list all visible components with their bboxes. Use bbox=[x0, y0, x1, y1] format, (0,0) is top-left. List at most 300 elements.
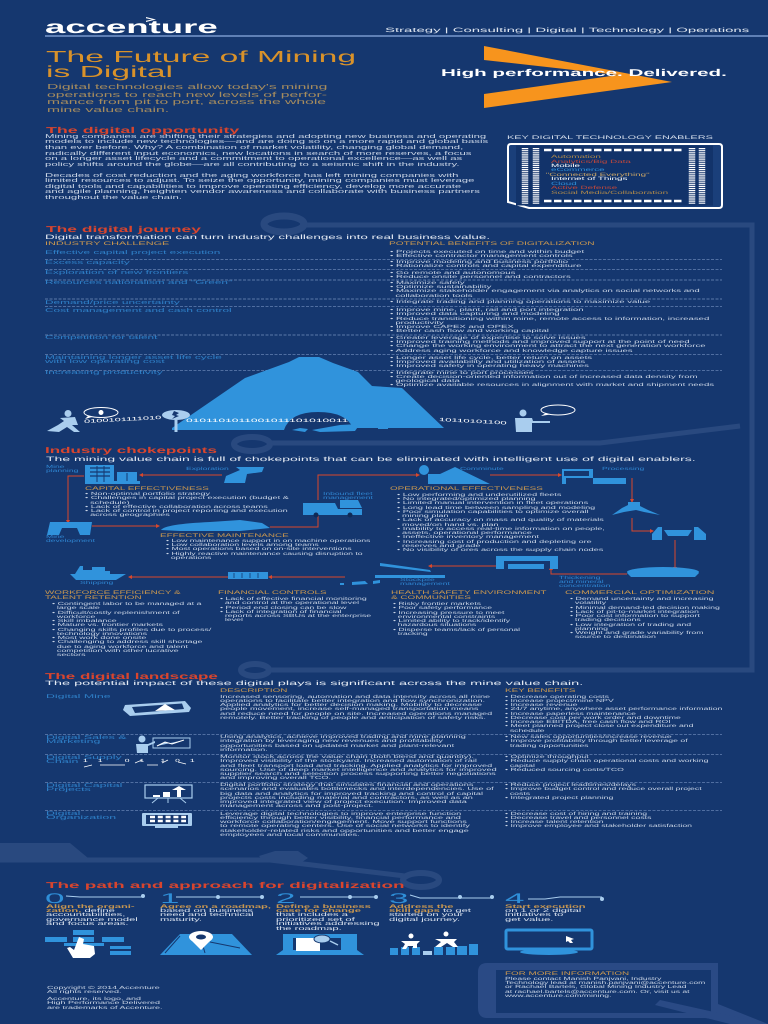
copyright: Copyright © 2014 Accenture bbox=[47, 985, 160, 990]
subheading: Digital transformation can turn industry challenges into real business value. bbox=[45, 234, 490, 240]
icon: binary graph bbox=[84, 760, 186, 767]
numbered step 3: started on your bbox=[389, 912, 463, 918]
arrows: value chain flow bbox=[66, 473, 677, 579]
block: workforce efficiency: • Mature vs. frontier markets bbox=[52, 622, 163, 627]
binary: left: 0100101111010 bbox=[84, 416, 161, 425]
label: inbound fleet: Inbound fleet bbox=[323, 491, 372, 496]
panel: for more information: at rachael.bartels@accenture.com. Or, visit us at bbox=[505, 989, 690, 994]
block: capital effectiveness: • Lack of effective collaboration across teams bbox=[85, 504, 268, 509]
row: digital mine: Applied analytics for better decision making. Mobility to decrease bbox=[220, 702, 482, 707]
block: workforce efficiency: large scale bbox=[57, 605, 100, 610]
block: operational effectiveness: • Ineffective inventory management bbox=[397, 534, 539, 539]
block: health safety environment: HEALTH SAFETY ENVIRONMENT bbox=[391, 590, 546, 596]
block: commercial optimization: • Lack of pit-to-market integration bbox=[570, 609, 699, 614]
icon: processing bbox=[562, 469, 626, 484]
block: workforce efficiency: workforce bbox=[57, 614, 95, 619]
text block: opportunity paragraph 2: and agile planning, heighten vendor awareness and collaborate with business partners bbox=[45, 189, 480, 195]
block: financial controls: reports across SBUs at the enterprise bbox=[225, 613, 371, 618]
block: capital effectiveness: CAPITAL EFFECTIVENESS bbox=[85, 486, 209, 492]
panel: for more information bbox=[477, 963, 768, 1024]
heading: The digital opportunity bbox=[46, 125, 239, 135]
enablers heading: KEY DIGITAL TECHNOLOGY ENABLERS bbox=[507, 134, 713, 140]
icon: monitor with cursor bbox=[506, 930, 592, 955]
numbered step 2: that includes a bbox=[276, 912, 348, 918]
icon: people on steps bbox=[390, 932, 478, 955]
row: digital organization: Leverage digital technologies to improve enterprise function bbox=[220, 811, 461, 816]
block: effective maintenance bbox=[160, 532, 370, 560]
block: financial controls: level bbox=[225, 617, 243, 622]
numbered step 2: initiatives addressing bbox=[276, 921, 380, 927]
trademark note bbox=[47, 997, 163, 1010]
block: health safety environment: • Increasing pressure to meet bbox=[393, 610, 504, 615]
block: workforce efficiency bbox=[45, 590, 212, 657]
numbered step 0: and focus areas. bbox=[46, 921, 128, 927]
icon: truck bbox=[303, 500, 362, 518]
chip: key digital technology enablers bbox=[507, 143, 723, 209]
text block: opportunity paragraph 2: throughout the value chain. bbox=[45, 195, 182, 201]
challenge list bbox=[45, 250, 232, 376]
icon: conveyor bbox=[419, 465, 490, 484]
row: digital supply chain: Chain bbox=[46, 759, 78, 765]
row: digital supply chain: • Reduce supply chain operational costs and working bbox=[505, 758, 708, 763]
row: digital capital projects: • Integrated project planning bbox=[505, 795, 613, 800]
block: operational effectiveness: • Inability to access real-time information on people, bbox=[397, 526, 605, 531]
copyright: All rights reserved. bbox=[47, 989, 122, 994]
icon: warehouse bbox=[496, 556, 558, 569]
benefits list: • Change the working environment to attract the next generation workforce bbox=[390, 343, 706, 348]
benefits list: • Integrate mine to port processes bbox=[390, 370, 533, 375]
block: effective maintenance: • Low maintenance support in on machine operations bbox=[166, 538, 370, 543]
text block: opportunity paragraph 2: Decades of cost reduction and the aging workforce has left mining companies with bbox=[45, 172, 458, 178]
chip: key digital technology enablers: "Connected Everything" bbox=[546, 172, 650, 177]
block: operational effectiveness: • Poor simulation capabilities to optimize overall bbox=[397, 509, 589, 514]
row: digital mine: and reduce need for people on site. Increased operations managed bbox=[220, 711, 492, 716]
block: financial controls: FINANCIAL CONTROLS bbox=[218, 590, 327, 596]
label: mine development: Mine bbox=[46, 534, 65, 539]
row: digital supply chain: Digital Supply bbox=[46, 755, 122, 761]
subtitle: mine value chain. bbox=[47, 105, 169, 114]
chip: key digital technology enablers: Social Media/Collaboration bbox=[551, 190, 668, 195]
panel: the digital landscape bbox=[45, 671, 722, 837]
icon: lightning pin bbox=[162, 410, 190, 432]
row: digital sales and marketing bbox=[46, 734, 688, 752]
challenge list: Effective capital project execution bbox=[45, 250, 220, 256]
heading: The digital landscape bbox=[45, 671, 218, 681]
numbered step 1: based on business bbox=[160, 908, 253, 914]
row: digital organization: Organization bbox=[46, 815, 116, 821]
row: digital sales and marketing: • Improve profitability through better leverage of bbox=[505, 738, 688, 743]
icon: excavator bbox=[224, 467, 264, 483]
block: operational effectiveness: reserves and grade bbox=[402, 543, 480, 548]
benefits list: geological data bbox=[395, 378, 460, 383]
row: digital mine: Increased sensoring, automation and data intensity across all mine bbox=[220, 694, 490, 699]
block: operational effectiveness: • Increasing cost of production and depleting ore bbox=[397, 539, 592, 544]
numbered step 3 bbox=[389, 890, 471, 923]
block: health safety environment: hazardous situations bbox=[398, 622, 476, 627]
numbered step 1 bbox=[160, 890, 271, 923]
numbered step 1: Agree on a roadmap, bbox=[160, 904, 271, 910]
challenge list: Maintaining longer asset life cycle bbox=[45, 355, 222, 361]
text block: opportunity paragraph 1: than ever before. Why? A combination of market volatility, changing global demand, bbox=[45, 145, 463, 151]
tagline: Strategy | Consulting | Digital | Technology | Operations bbox=[385, 27, 749, 34]
icon: mine development bbox=[47, 522, 92, 535]
row: digital capital projects bbox=[46, 782, 702, 808]
benefits list: • Reduce onsite personnel and contractors bbox=[390, 274, 571, 279]
benefits list: • Reduce transitioning within mine, remote access to information, increased bbox=[390, 316, 709, 321]
row: digital capital projects: projects costs including material and contractors, as well as an bbox=[220, 795, 473, 800]
block: operational effectiveness: • No visibility of ores across the supply chain nodes bbox=[397, 547, 603, 552]
block: health safety environment: • Limited ability to track/identify bbox=[393, 618, 510, 623]
row dividers bbox=[45, 259, 722, 371]
numbered step 1: 1 bbox=[160, 890, 179, 906]
heading: The path and approach for digitalization bbox=[46, 880, 405, 890]
row: digital organization bbox=[46, 810, 692, 837]
icon: orange chevron bbox=[484, 46, 672, 108]
row: digital sales and marketing: trading opportunities bbox=[510, 743, 589, 748]
numbered step 1: maturity. bbox=[160, 917, 202, 923]
numbered step 3: Address the bbox=[389, 904, 453, 910]
block: workforce efficiency: competition with other lucrative bbox=[57, 648, 179, 653]
header rule bbox=[45, 35, 768, 36]
block: operational effectiveness: • No integrated/optimized planning bbox=[397, 496, 536, 501]
row: digital sales and marketing: Marketing bbox=[46, 739, 100, 745]
icon: building bbox=[85, 465, 140, 484]
subtitle: mance from pit to port, across the whole bbox=[47, 97, 326, 106]
label: processing: Processing bbox=[602, 466, 644, 471]
block: workforce efficiency: • Skill imbalance bbox=[52, 618, 117, 623]
numbered step 4: on 1 or 2 digital bbox=[505, 908, 581, 914]
label: stockpile: Stockpile bbox=[400, 577, 435, 582]
numbered step 3: 3 bbox=[389, 890, 408, 906]
icon: tablet grid bbox=[142, 813, 192, 828]
block: commercial optimization: COMMERCIAL OPTIMIZATION bbox=[565, 590, 714, 596]
row: digital organization: • Increase talent retention bbox=[505, 819, 604, 824]
heading: The digital journey bbox=[46, 224, 201, 234]
row: digital supply chain: Monitor stock across the value chain (both blend and quantity). bbox=[220, 754, 474, 759]
block: operational effectiveness: OPERATIONAL EFFECTIVENESS bbox=[390, 486, 543, 492]
block: workforce efficiency: WORKFORCE EFFICIENCY & bbox=[45, 590, 181, 596]
row: digital capital projects: scenarios and evaluates bottlenecks and interdependencies. Use of bbox=[220, 786, 494, 791]
row: digital mine: remotely. Better tracking of people and anticipation of safety risks. bbox=[220, 715, 486, 720]
block: commercial optimization: planning bbox=[575, 626, 608, 631]
label: exploration: Exploration bbox=[186, 466, 229, 471]
numbered step 0: 0 bbox=[45, 890, 64, 906]
icon: phone bbox=[123, 701, 191, 716]
block: workforce efficiency: • Difficult/costly replenishment of bbox=[52, 610, 180, 615]
row: digital organization: stakeholder-related risks and opportunities and better engage bbox=[220, 828, 469, 833]
challenge list: Cost management and cash control bbox=[45, 308, 232, 314]
label: thickening: concentration bbox=[559, 583, 610, 588]
block: financial controls: • Lack of integration of financial bbox=[220, 609, 342, 614]
panel: the path and approach bbox=[45, 880, 604, 958]
benefits list: productivity bbox=[395, 320, 444, 325]
block: operational effectiveness: • Low performing and underutilized fleets bbox=[397, 492, 561, 497]
block: effective maintenance: • Most operations based on on-site interventions bbox=[166, 546, 352, 551]
row: digital sales and marketing: • New sales opportunities/increase revenue bbox=[505, 734, 672, 739]
challenge list: Resources nationalism and "Green" bbox=[45, 280, 232, 286]
label: stockpile bbox=[400, 577, 450, 586]
row: digital mine: operations to facilitate better integration and flow synchronization. bbox=[220, 698, 485, 703]
row: digital supply chain: capital bbox=[510, 763, 535, 768]
row: digital capital projects: Digital Capital bbox=[46, 782, 122, 788]
benefits list: collaboration tools bbox=[395, 293, 473, 298]
text block: opportunity paragraph 1: on a longer asset lifecycle and a commitment to operational excellence—as well as bbox=[45, 156, 462, 162]
copyright bbox=[47, 985, 160, 994]
benefits list: • Maximize safety bbox=[390, 280, 465, 285]
numbered step 2: 2 bbox=[276, 890, 295, 906]
block: financial controls: • Period end closing can be slow bbox=[220, 605, 347, 610]
numbered step 3: digital journey. bbox=[389, 917, 460, 923]
slogan: High performance. Delivered. bbox=[441, 68, 727, 79]
icon: ship bbox=[70, 566, 126, 580]
row: digital supply chain: and improving overall TCO. bbox=[220, 775, 331, 780]
block: commercial optimization: • Poor cost information to support bbox=[570, 613, 700, 618]
subheading: The mining value chain is full of chokepoints that can be eliminated with intelligent use of digital enablers. bbox=[46, 456, 696, 462]
row: digital supply chain: • Reduced sourcing costs/TCO bbox=[505, 767, 624, 772]
icon: person with money bubble bbox=[515, 405, 575, 432]
numbered step 4: Start execution bbox=[505, 904, 586, 910]
panel: industry chokepoints bbox=[45, 445, 720, 657]
icon: logo chevron bbox=[146, 17, 156, 22]
challenge list: Excess capacity bbox=[45, 260, 130, 266]
label: inbound fleet bbox=[323, 491, 373, 500]
icon: stockpile conveyor bbox=[340, 563, 445, 585]
title: The Future of Mining bbox=[46, 48, 356, 66]
label: inbound fleet: management bbox=[323, 495, 373, 500]
icon: mountain bbox=[172, 357, 444, 432]
chip: key digital technology enablers: Automation bbox=[551, 154, 601, 159]
row: digital mine: • Increase paperless maintenance bbox=[505, 711, 636, 716]
benefits list: • Greater leverage of expertise to solve issues bbox=[390, 335, 586, 340]
panel: for more information: Technology lead at manish.panjvani@accenture.com bbox=[505, 980, 705, 985]
block: operational effectiveness: moved/on hand vs. plan bbox=[402, 522, 499, 527]
icon: flotation bbox=[612, 502, 660, 515]
label: mine development: development bbox=[46, 538, 95, 543]
block: health safety environment: environmental constraints bbox=[398, 614, 495, 619]
row: digital supply chain: • Optimize throughput bbox=[505, 754, 589, 759]
row: digital supply chain: and fleet transport load and tracking. Applied analytics for improved bbox=[220, 763, 492, 768]
block: operational effectiveness: • Limited manual intervention in fleet operations bbox=[397, 500, 588, 505]
chip: key digital technology enablers: Analytics/Big Data bbox=[551, 159, 631, 164]
row: digital supply chain: supplier search and selection process supporting better negotiations bbox=[220, 771, 496, 776]
label: mine planning: Mine bbox=[46, 464, 65, 469]
numbered step 2: the roadmap. bbox=[276, 926, 342, 932]
block: workforce efficiency: technology innovations bbox=[57, 631, 147, 636]
block: workforce efficiency: due to aging workforce and talent bbox=[57, 644, 188, 649]
benefits list: • Projects executed on time and within budget bbox=[390, 249, 584, 254]
block: operational effectiveness: assets, operational performance bbox=[402, 530, 532, 535]
block: health safety environment bbox=[391, 590, 546, 636]
panel: for more information: www.accenture.com/mining. bbox=[505, 993, 611, 998]
block: commercial optimization: • Minimal demand-led decision making bbox=[570, 605, 720, 610]
numbered step 0: Align the organi- bbox=[46, 904, 135, 910]
block: workforce efficiency: sectors bbox=[57, 652, 86, 657]
block: effective maintenance: • Highly reactive maintenance causing disruption to bbox=[166, 551, 363, 556]
subtitle bbox=[47, 82, 327, 114]
panel: for more information: Please contact Manish Panjvani, Industry bbox=[505, 976, 661, 981]
column header: industry challenge: INDUSTRY CHALLENGE bbox=[45, 241, 169, 247]
text block: opportunity paragraph 1: models to include new technologies—and are doing so on a more rapid and global basis bbox=[45, 139, 488, 145]
chip: key digital technology enablers: Mobile bbox=[551, 163, 580, 168]
row: digital sales and marketing: opportunities based on updated market and plant-relevant bbox=[220, 743, 454, 748]
trademark note: Accenture, its logo, and bbox=[47, 996, 141, 1001]
block: commercial optimization: trading decisions bbox=[575, 617, 641, 622]
row: digital organization: • Decrease cost of hiring and training bbox=[505, 811, 647, 816]
row: digital mine: • Increase revenue bbox=[505, 702, 578, 707]
text block: opportunity paragraph 2: digital tools and capabilities to improve operating efficiency, develop more accurate bbox=[45, 184, 461, 190]
label: comminute: Comminute bbox=[460, 466, 504, 471]
row: digital mine: • Decrease cost per work order and downtime bbox=[505, 715, 681, 720]
benefits list: • Improved safety in operating heavy machines bbox=[390, 363, 589, 368]
challenge list: Exploration of new frontiers bbox=[45, 270, 188, 276]
block: health safety environment: • Risky frontier markets bbox=[393, 601, 481, 606]
row: digital capital projects: costs bbox=[510, 791, 530, 796]
trademark note: are trademarks of Accenture. bbox=[47, 1005, 163, 1010]
chip: key digital technology enablers: Internet of Things bbox=[551, 176, 627, 181]
benefits list: • Optimize sustainability bbox=[390, 284, 491, 289]
logo: accenture: accenture bbox=[45, 17, 218, 37]
block: workforce efficiency: • Challenging to address skill shortage bbox=[52, 639, 202, 644]
block: commercial optimization bbox=[565, 590, 720, 639]
benefits list: • Improved availability and utilization of assets bbox=[390, 359, 585, 364]
benefits list: • Maximize stakeholder engagement via analytics on social networks and bbox=[390, 288, 700, 293]
numbered step 4 bbox=[505, 890, 586, 923]
benefits list: • Improve mine, plant, rail and port integration bbox=[390, 307, 584, 312]
trademark note: High Performance Delivered bbox=[47, 1000, 160, 1005]
subtitle: operations to reach new levels of perfor- bbox=[47, 90, 327, 99]
block: health safety environment: • Disperse teams/lack of personal bbox=[393, 627, 520, 632]
row: digital organization: to remote operating centers. Use of social networks to identify bbox=[220, 823, 470, 828]
row: digital organization: workforce collaboration/engagement. Move support functions bbox=[220, 819, 467, 824]
numbered step 4: 4 bbox=[505, 890, 524, 906]
icon: rail car bbox=[228, 572, 268, 579]
block: financial controls: • Lack of effective financial monitoring bbox=[220, 596, 367, 601]
chip: key digital technology enablers: Active Defense bbox=[551, 185, 617, 190]
numbered step 0: zation, define bbox=[46, 908, 115, 914]
numbered step 1: need and technical bbox=[160, 912, 254, 918]
numbered step 4: get value. bbox=[505, 917, 553, 923]
block: operational effectiveness: • Lack of accuracy on mass and quality of materials bbox=[397, 517, 604, 522]
label: thickening bbox=[559, 575, 610, 588]
row: digital mine: • Increase EBITDA, free cash flow and ROI bbox=[505, 719, 671, 724]
title: is Digital bbox=[46, 64, 173, 80]
benefits list: • Improved data capturing and modeling bbox=[390, 311, 560, 316]
label: mine planning bbox=[46, 464, 78, 473]
binary: right: 10110101100 bbox=[439, 418, 507, 427]
text block: opportunity paragraph 1: radically different input economics, new locations in search of more reserves, a focus bbox=[45, 151, 471, 157]
row: digital supply chain: sourcing. Use of deep market intelligence and analytics for improved bbox=[220, 767, 497, 772]
benefits list: • Rationalize controls and capital expenditure bbox=[390, 263, 581, 268]
block: effective maintenance: operations bbox=[171, 555, 211, 560]
block: workforce efficiency: TALENT RETENTION bbox=[45, 595, 142, 601]
row: digital mine: • Meet planned project close out expenditure and bbox=[505, 723, 693, 728]
row: digital supply chain bbox=[46, 754, 708, 780]
numbered step 2: case for change bbox=[276, 908, 361, 914]
block: capital effectiveness bbox=[85, 486, 289, 517]
row: digital capital projects: management across and post-project. bbox=[220, 803, 373, 808]
subtitle: Digital technologies allow today's mining bbox=[47, 82, 327, 91]
benefits list: • Better cash flow and working capital bbox=[390, 328, 549, 333]
icon: map with pin bbox=[160, 931, 252, 955]
row: digital mine: Digital Mine bbox=[46, 694, 111, 700]
text block: opportunity paragraph 1: policy shifts around the globe—are all contributing to a seismic shift in the industry. bbox=[45, 162, 459, 168]
benefits list: • Improve modeling and business portfolio bbox=[390, 259, 568, 264]
row: digital sales and marketing: integration by leveraging new revenues and profitability bbox=[220, 738, 443, 743]
row: digital mine: • 24/7 anytime, anywhere asset performance information bbox=[505, 706, 722, 711]
text block: opportunity paragraph 2 bbox=[45, 172, 480, 201]
label: thickening: Thickening bbox=[559, 575, 600, 580]
panel: for more information: or Rachael Bartels, Global Mining Industry Lead bbox=[505, 984, 687, 989]
numbered step 0: governance model bbox=[46, 917, 138, 923]
row: digital sales and marketing: Digital Sales & bbox=[46, 734, 127, 740]
block: operational effectiveness bbox=[390, 486, 605, 552]
subheading: The potential impact of these digital plays is significant across the mine value chain. bbox=[45, 680, 583, 686]
block: capital effectiveness: • Lack of control in project reporting and execution bbox=[85, 508, 288, 513]
label: thickening: and mineral bbox=[559, 579, 604, 584]
block: workforce efficiency: • Contingent labor to be managed at a bbox=[52, 601, 202, 606]
icon: ore blob bbox=[161, 520, 270, 531]
circuit lines bbox=[66, 894, 604, 900]
row: digital organization: efficiency through better visibility, financial performance and bbox=[220, 815, 461, 820]
block: capital effectiveness: • Challenges in capital project execution (budget & bbox=[85, 495, 289, 500]
row: digital mine: • Increase project/mine NPV bbox=[505, 698, 614, 703]
row: digital supply chain: 1 1 0 1 1 0 1 bbox=[83, 758, 198, 763]
row: digital organization: • Decrease travel and personnel costs bbox=[505, 815, 651, 820]
block: workforce efficiency: • Most work done onsite bbox=[52, 635, 146, 640]
benefits list: • Go remote and autonomous bbox=[390, 270, 515, 275]
challenge list: Competition for talent bbox=[45, 335, 157, 341]
benefits list: • Create decision-oriented information out of increased data density from bbox=[390, 374, 698, 379]
numbered step 3: skill gaps to get bbox=[389, 908, 471, 914]
numbered step 4: initiatives to bbox=[505, 912, 563, 918]
block: financial controls: and control at the operational level bbox=[225, 600, 359, 605]
block: effective maintenance: EFFECTIVE MAINTENANCE bbox=[160, 532, 289, 538]
benefits list: • Longer asset life cycle, better return on assets bbox=[390, 355, 592, 360]
row: digital organization: employees and local communities. bbox=[220, 832, 360, 837]
header bbox=[45, 17, 768, 114]
row: digital mine: schedule bbox=[510, 728, 545, 733]
row: digital sales and marketing: Using analytics, achieve improved trading and mine planning bbox=[220, 734, 466, 739]
block: capital effectiveness: • Non-optimal portfolio strategy bbox=[85, 491, 210, 496]
block: health safety environment: & COMMUNITIES bbox=[391, 595, 471, 601]
column header: description: DESCRIPTION bbox=[220, 688, 287, 694]
block: workforce efficiency: • Changing skills profiles due to process/ bbox=[52, 627, 211, 632]
block: commercial optimization: source to destination bbox=[575, 634, 656, 639]
numbered step 2 bbox=[276, 890, 380, 932]
benefits list bbox=[390, 249, 714, 387]
benefits list: • Improved training methods and improved support at the point of need bbox=[390, 339, 690, 344]
text block: opportunity paragraph 1 bbox=[45, 134, 488, 168]
block: financial controls bbox=[218, 590, 371, 622]
icon: org chart with hand bbox=[45, 930, 131, 958]
title bbox=[46, 48, 356, 80]
label: mine development bbox=[46, 534, 95, 543]
text block: opportunity paragraph 2: limited resources to adjust. To seize the opportunity, mining companies must leverage bbox=[45, 178, 474, 184]
benefits list: • Address aging workforce and knowledge capture issues bbox=[390, 348, 633, 353]
chip: key digital technology enablers: eCommerce bbox=[551, 167, 605, 172]
block: commercial optimization: • Demand uncertainty and increasing bbox=[570, 596, 714, 601]
chip: key digital technology enablers: Cloud bbox=[551, 181, 577, 186]
column header: potential benefits: POTENTIAL BENEFITS OF DIGITALIZATION bbox=[389, 241, 595, 247]
block: operational effectiveness: • Long lead time between sampling and modeling bbox=[397, 505, 595, 510]
footer bbox=[47, 963, 768, 1024]
row: digital capital projects: • Improve budget control and reduce overall project bbox=[505, 786, 702, 791]
block: capital effectiveness: schedule) bbox=[90, 500, 130, 505]
block: commercial optimization: • Low integration of trading and bbox=[570, 622, 691, 627]
row: digital organization: Digital bbox=[46, 810, 80, 816]
numbered step 2: Define a business bbox=[276, 904, 371, 910]
challenge list: Demand/price uncertainty bbox=[45, 300, 180, 306]
